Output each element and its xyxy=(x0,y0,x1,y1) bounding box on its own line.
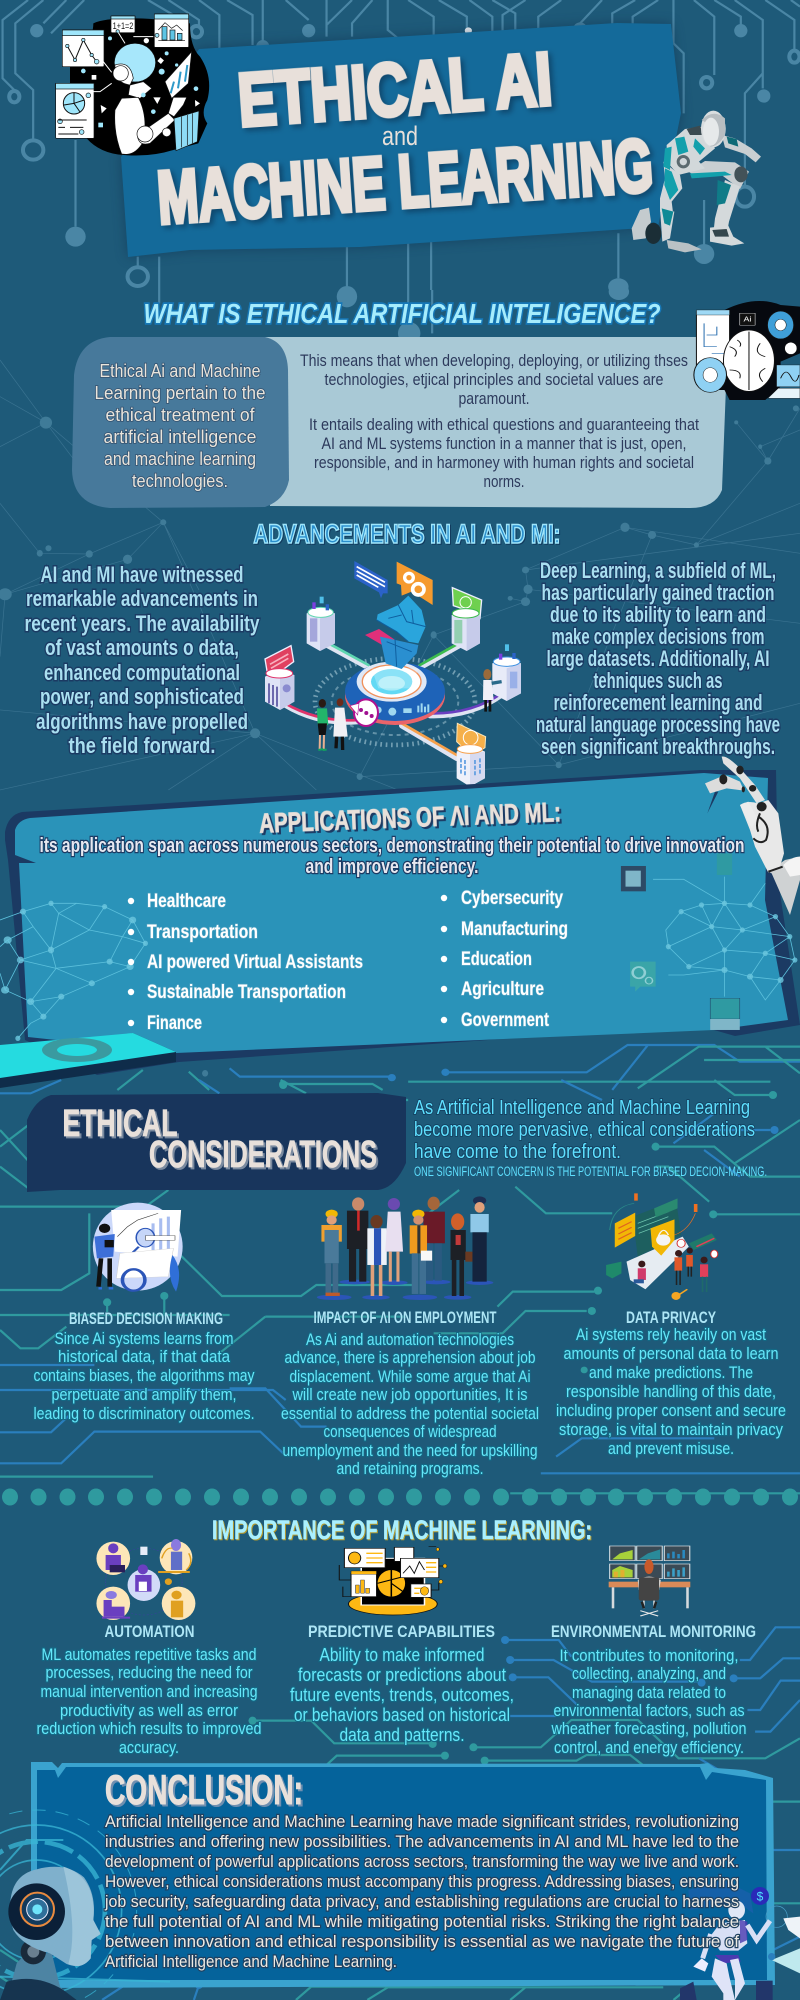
column body: advance, there is apprehension about job xyxy=(284,1348,536,1367)
definition text: and machine learning xyxy=(104,449,256,469)
conclusion body text xyxy=(104,1812,739,1971)
robot head and body xyxy=(114,43,156,82)
applications intro xyxy=(40,835,744,878)
column body: essential to address the potential societal xyxy=(281,1404,539,1423)
explanation text: responsible, and in harmoney with human rights and societal xyxy=(314,454,694,472)
column body: processes, reducing the need for xyxy=(46,1663,253,1682)
list: left column sectors: AI powered Virtual Assistants xyxy=(147,952,363,973)
conclusion body text: industries and offering new possibilities. The advancements in AI and ML have led to the xyxy=(105,1832,739,1851)
column: automation xyxy=(36,1622,262,1757)
explanation text: norms. xyxy=(484,473,524,491)
conclusion body text: the full potential of AI and ML while mitigating potential risks. Striking the right balance xyxy=(105,1912,739,1931)
background: connecting verticals and network xyxy=(0,283,800,790)
mesh brain right xyxy=(653,877,797,1000)
conclusion body text: Artificial Intelligence and Machine Learning have made significant strides, revolutionizing xyxy=(105,1812,739,1831)
column body: accuracy. xyxy=(119,1738,179,1757)
illustration: silver humanoid robot crouching xyxy=(632,111,761,252)
list: right column sectors: Manufacturing xyxy=(461,919,568,940)
icon: predictive dashboards xyxy=(339,1547,447,1615)
handheld panels xyxy=(165,52,192,98)
list: right column sectors: Education xyxy=(461,949,532,970)
column body: unemployment and the need for upskilling xyxy=(282,1441,538,1460)
column: environmental monitoring xyxy=(551,1622,756,1757)
text block: advancements left: remarkable advancements in xyxy=(26,586,258,611)
explanation text: This means that when developing, deploying, or utilizing thses xyxy=(300,352,688,370)
heading: what is ethical AI: WHAT IS ETHICAL ARTIFICIAL INTELIGENCE? xyxy=(144,298,660,329)
title connector word: and xyxy=(382,121,418,151)
icon: environmental monitoring desk xyxy=(609,1546,690,1616)
background: circuit lines around conclusion xyxy=(0,1802,800,2000)
icon: data privacy laptop xyxy=(606,1193,718,1300)
column body: productivity as well as error xyxy=(60,1701,238,1720)
illustration: AI head profile xyxy=(0,1867,101,2000)
text block: ethical intro: have come to the forefront. xyxy=(414,1141,621,1163)
text block: advancements left: AI and MI have witnessed xyxy=(40,562,244,587)
panel surface xyxy=(15,773,788,1053)
column body: wheather forecasting, pollution xyxy=(551,1719,746,1738)
header panel xyxy=(121,23,681,257)
panel: ethical considerations banner xyxy=(27,1093,406,1192)
text block: ethical intro xyxy=(414,1097,767,1179)
column body: or behaviors based on historical xyxy=(294,1704,510,1725)
faded technology icons xyxy=(621,853,740,1030)
column body: and prevent misuse. xyxy=(608,1439,734,1458)
list: right column sectors: Government xyxy=(461,1010,550,1031)
icon: biased decision analysis xyxy=(93,1203,183,1292)
explanation text: It entails dealing with ethical questions and guaranteeing that xyxy=(309,416,699,434)
explanation background xyxy=(260,337,727,508)
background: lower circuit lines under the applications panel xyxy=(117,1045,800,1090)
illustration: phone with gear xyxy=(0,1033,176,1088)
background: circuit lines in machine learning section xyxy=(248,1627,800,1773)
list: right column sectors: Cybersecurity xyxy=(461,888,563,909)
conclusion body text: development of powerful applications across sectors, transforming the way we live and work. xyxy=(105,1852,739,1871)
column body: contains biases, the algorithms may xyxy=(34,1366,255,1385)
column body: manual intervention and increasing xyxy=(40,1682,258,1701)
conclusion surface xyxy=(37,1767,767,1980)
definition text xyxy=(94,361,266,491)
column heading: AUTOMATION xyxy=(104,1622,194,1641)
math label: 1+1=2 xyxy=(113,21,133,31)
column body: It contributes to monitoring, xyxy=(560,1646,738,1665)
column: impact of AI on employment xyxy=(281,1308,539,1478)
text block: advancements right xyxy=(536,558,780,759)
list: right column sectors xyxy=(441,888,568,1031)
speech bubbles xyxy=(265,561,486,756)
conclusion body text: job security, safeguarding data privacy, and establishing regulations are crucial to harness xyxy=(104,1892,739,1911)
column body: historical data, if that data xyxy=(58,1347,230,1366)
list: left column sectors: Sustainable Transportation xyxy=(147,982,346,1003)
column body: perpetuate and amplify them, xyxy=(52,1385,236,1404)
explanation text: AI and ML systems function in a manner that is just, open, xyxy=(322,435,686,453)
definition text: artificial intelligence xyxy=(104,427,256,447)
text block: advancements left: algorithms have propelled xyxy=(36,709,248,734)
definition text: technologies. xyxy=(132,471,228,491)
panel border xyxy=(5,770,800,1075)
definition background xyxy=(72,337,289,508)
explanation text: technologies, etjical principles and societal values are xyxy=(324,371,664,389)
mesh brain left xyxy=(0,901,148,1041)
definition text: Learning pertain to the xyxy=(94,383,266,403)
list: left column sectors: Finance xyxy=(147,1013,202,1034)
server towers xyxy=(265,597,521,787)
column body: future events, trends, outcomes, xyxy=(290,1684,514,1705)
column body: and make predictions. The xyxy=(589,1363,753,1382)
column heading: DATA PRIVACY xyxy=(626,1308,716,1327)
column body: consequences of widespread xyxy=(324,1422,496,1441)
text block: advancements left: power, and sophisticated xyxy=(40,684,244,709)
column: predictive capabilities xyxy=(290,1622,514,1745)
column body: environmental factors, such as xyxy=(554,1701,744,1720)
column body xyxy=(556,1325,786,1458)
column body: ML automates repetitive tasks and xyxy=(42,1645,256,1664)
column body: collecting, analyzing, and xyxy=(572,1664,726,1683)
text block: advancements left: the field forward. xyxy=(68,733,216,758)
panel: definition of ethical AI xyxy=(72,337,727,508)
conclusion body text: Artificial Intelligence and Machine Learning. xyxy=(105,1952,397,1971)
column body xyxy=(36,1645,262,1757)
text block: advancements right: tehniques such as xyxy=(594,668,722,693)
column body: will create new job opportunities, It is xyxy=(292,1385,528,1404)
column heading: PREDICTIVE CAPABILITIES xyxy=(308,1622,495,1641)
divider dots xyxy=(2,1488,798,1506)
column body: As Ai and automation technologies xyxy=(306,1330,514,1349)
column body xyxy=(290,1644,514,1745)
column body: control, and energy efficiency. xyxy=(554,1738,744,1757)
text block: advancements left xyxy=(24,562,260,758)
illustration: AI robot with data windows xyxy=(56,14,209,156)
column body: reduction which results to improved xyxy=(36,1719,262,1738)
title line 1: ETHICAL AI xyxy=(235,37,554,142)
conclusion heading: CONCLUSION: xyxy=(105,1766,303,1813)
dollar sign: $ xyxy=(757,1889,764,1903)
heading: importance of machine learning: IMPORTANCE OF MACHINE LEARNING: xyxy=(212,1515,592,1545)
list: left column sectors: Healthcare xyxy=(147,891,226,912)
column body: managing data related to xyxy=(572,1683,726,1702)
text block: advancements left: enhanced computational xyxy=(44,660,240,685)
column heading: BIASED DECISION MAKING xyxy=(69,1309,223,1328)
column heading: IMPACT OF ΛI ON EMPLOYMENT xyxy=(314,1308,497,1327)
text block: advancements left: recent years. The availability xyxy=(24,611,260,636)
illustration: small blue robot xyxy=(680,1880,800,2000)
definition text: Ethical Ai and Machine xyxy=(100,361,260,381)
column body: and retaining programs. xyxy=(336,1459,484,1478)
column body: data and patterns. xyxy=(340,1724,464,1745)
column body xyxy=(551,1646,746,1757)
icon: workers of different professions xyxy=(317,1196,493,1300)
column: biased decision making xyxy=(34,1309,255,1423)
conclusion frame xyxy=(31,1762,775,1988)
background: top circuit lines xyxy=(3,0,800,300)
background: circuit lines in ethical considerations section xyxy=(0,1080,800,1493)
illustration: robot hand xyxy=(705,756,800,915)
panel: conclusion xyxy=(0,1762,800,2000)
definition text: ethical treatment of xyxy=(106,405,255,425)
illustration: isometric AI hub xyxy=(265,561,521,787)
heading: applications: APPLICATIONS OF ΛI AND ML: xyxy=(259,796,562,839)
text block: advancements left: of vast amounts o data, xyxy=(45,635,239,660)
list: left column sectors xyxy=(128,891,363,1034)
panel: applications of AI and ML xyxy=(0,756,800,1088)
conclusion body text: between innovation and ethical responsibility is essential as we navigate the future of xyxy=(105,1932,739,1951)
conclusion body text: However, ethical considerations must accompany this progress. Addressing biases, ensuring xyxy=(105,1872,739,1891)
column body: Ability to make informed xyxy=(320,1644,484,1665)
column body: Since Ai systems learns from xyxy=(54,1329,234,1348)
column body: leading to discriminatory outcomes. xyxy=(34,1404,254,1423)
title background shape xyxy=(121,23,681,257)
list: right column sectors: Agriculture xyxy=(461,979,544,1000)
chip label: Ai xyxy=(743,315,752,323)
list: left column sectors: Transportation xyxy=(147,922,258,943)
column body: forecasts or predictions about xyxy=(298,1664,506,1685)
column body xyxy=(34,1329,255,1423)
illustration: brain with gears xyxy=(694,301,800,400)
column body: displacement. While some argue that Ai xyxy=(290,1367,530,1386)
column: data privacy xyxy=(556,1308,786,1458)
column body xyxy=(281,1330,539,1478)
banner background xyxy=(27,1093,406,1192)
conclusion ring graphics xyxy=(0,1810,170,2000)
people around hub xyxy=(317,669,502,750)
banner heading line 2: CONSIDERATIONS xyxy=(149,1134,377,1176)
explanation text: paramount. xyxy=(458,390,530,408)
explanation text xyxy=(300,352,699,491)
banner heading line 1: ETHICAL xyxy=(62,1103,178,1145)
applications intro: and improve efficiency. xyxy=(306,856,478,878)
heading: advancements: ADVANCEMENTS IN AI AND MI: xyxy=(254,519,560,549)
icon: automation people and robots xyxy=(96,1539,195,1620)
